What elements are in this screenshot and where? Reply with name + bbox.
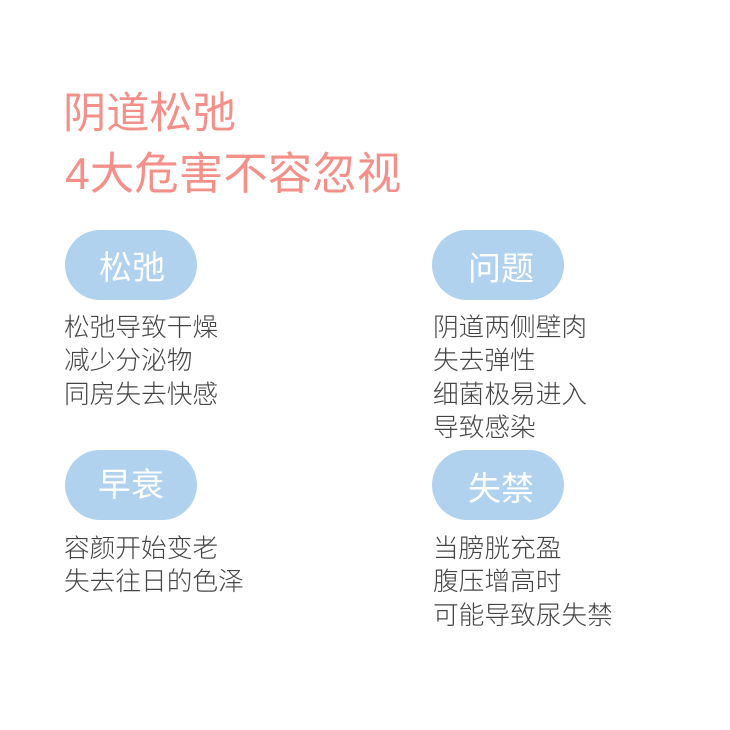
title line 2: 4大危害不容忽视 — [65, 150, 401, 199]
pill: 早衰: 早衰 — [98, 466, 164, 503]
pill: 问题: 问题 — [468, 250, 534, 287]
text: 松弛 description: 同房失去快感 — [64, 381, 218, 409]
title line 1: 阴道松弛 — [63, 90, 236, 138]
pill: 松弛 — [65, 230, 197, 300]
text: 失禁 description: 腹压增高时 — [433, 568, 561, 596]
text: 松弛 description: 松弛导致干燥 — [64, 314, 218, 342]
text: 早衰 description — [64, 535, 244, 596]
text: 失禁 description — [433, 535, 613, 630]
pill: 失禁: 失禁 — [468, 470, 534, 507]
pill: 早衰 — [65, 450, 197, 520]
text: 问题 description: 失去弹性 — [433, 347, 536, 375]
pill: 问题 — [432, 230, 564, 300]
text: 失禁 description: 当膀胱充盈 — [433, 535, 561, 563]
text: 问题 description: 阴道两侧壁肉 — [433, 314, 587, 342]
pill: 失禁 — [432, 450, 564, 520]
text: 早衰 description: 失去往日的色泽 — [64, 568, 244, 596]
text: 松弛 description — [64, 314, 218, 409]
text: 问题 description: 导致感染 — [433, 414, 536, 442]
pill: 松弛: 松弛 — [99, 249, 165, 286]
text: 松弛 description: 减少分泌物 — [64, 347, 192, 375]
text: 早衰 description: 容颜开始变老 — [64, 535, 218, 563]
text: 失禁 description: 可能导致尿失禁 — [433, 602, 613, 630]
text: 问题 description: 细菌极易进入 — [433, 381, 587, 409]
text: 问题 description — [433, 314, 587, 442]
